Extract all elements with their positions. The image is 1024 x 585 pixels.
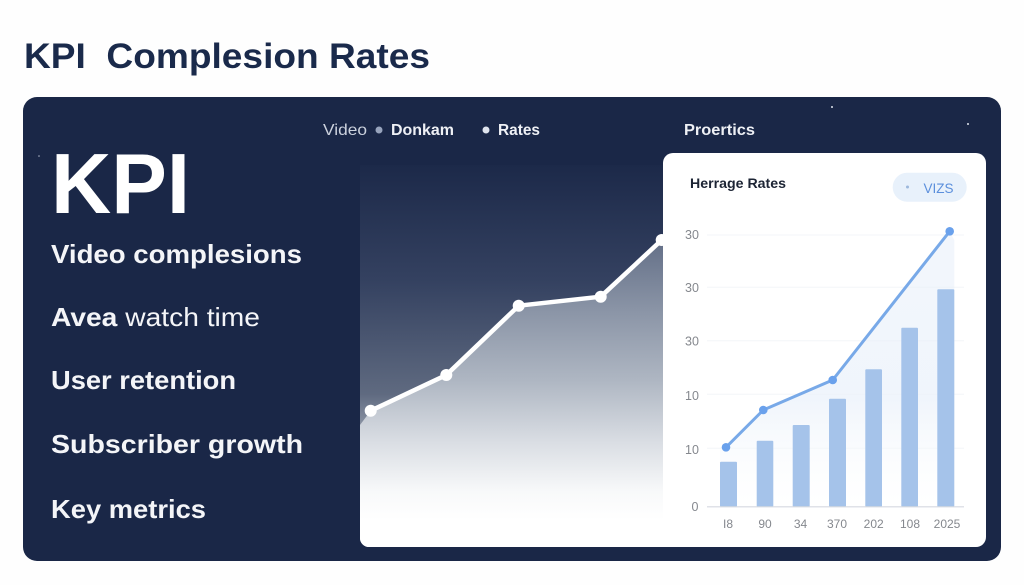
bar chart	[720, 289, 954, 507]
top navigation labels: Proertics	[684, 122, 755, 139]
x axis labels: 370	[827, 517, 847, 531]
area chart: white line over gradient	[360, 165, 680, 547]
x axis labels: 34	[794, 517, 807, 531]
x axis labels: I8	[723, 517, 733, 531]
y axis labels: 30	[685, 281, 699, 295]
y axis labels: 30	[685, 228, 699, 242]
top navigation labels: Donkam	[391, 122, 454, 139]
metric list: Key metrics	[51, 494, 206, 524]
top navigation labels: Video	[323, 122, 367, 139]
panel: main dark dashboard	[23, 97, 1001, 561]
y axis labels	[685, 228, 699, 514]
y axis labels: 10	[685, 389, 699, 403]
metric list: Subscriber growth	[51, 429, 303, 459]
metric list: User retention	[51, 365, 236, 395]
line series	[722, 227, 954, 452]
x axis labels	[723, 517, 961, 531]
top navigation labels	[323, 122, 755, 139]
x axis labels: 108	[900, 517, 920, 531]
x axis labels: 90	[758, 517, 772, 531]
area under line	[720, 231, 954, 507]
x axis labels: 2025	[934, 517, 961, 531]
metric list	[51, 239, 303, 524]
top navigation labels: Rates	[498, 122, 540, 139]
y axis labels: 10	[685, 443, 699, 457]
y axis labels: 30	[685, 334, 699, 348]
legend pill: VIZS	[924, 180, 954, 196]
x axis labels: 202	[864, 517, 884, 531]
card heading: Herrage Rates	[690, 176, 786, 191]
metric list: Video complesions	[51, 239, 302, 269]
panel: chart card	[663, 153, 986, 547]
legend pill	[893, 173, 967, 202]
y axis labels: 0	[692, 500, 699, 514]
metric list: Avea watch time	[51, 302, 260, 332]
KPI heading: KPI	[51, 137, 190, 232]
title: KPI Complesion Rates	[24, 37, 430, 76]
